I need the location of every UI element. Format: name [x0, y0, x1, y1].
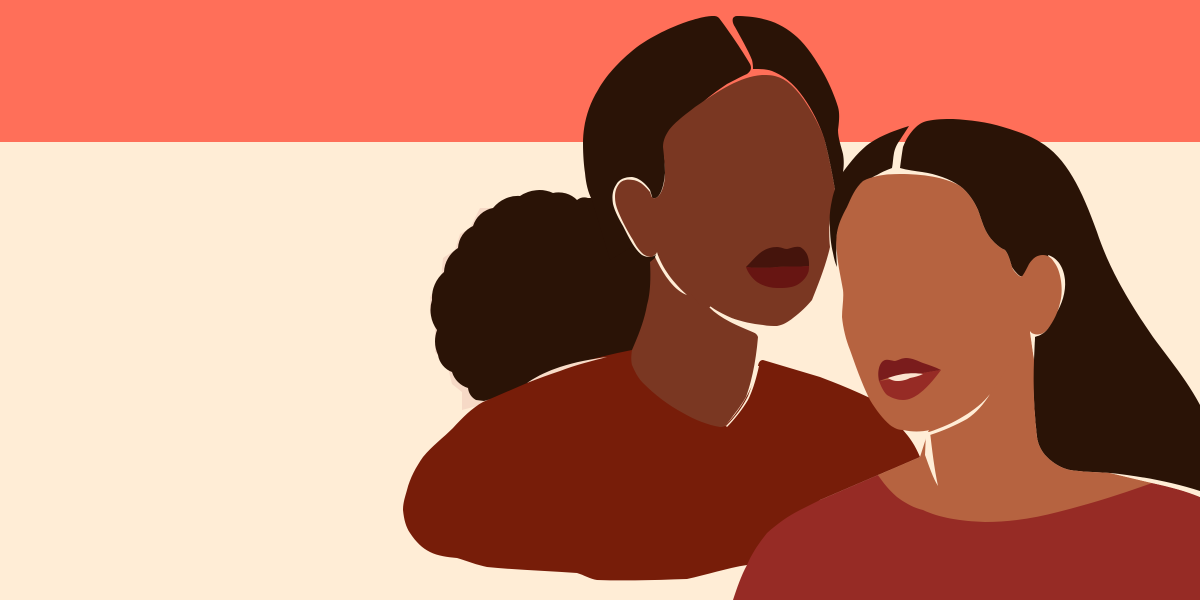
shirt: back woman	[403, 350, 920, 580]
lips: back woman	[746, 247, 809, 288]
chest and neck: front woman	[878, 320, 1152, 530]
neck sliver: front woman	[925, 432, 938, 486]
afro puff hair	[430, 190, 665, 401]
lower lip	[879, 370, 941, 400]
jaw line sliver: back woman	[655, 252, 687, 295]
back figure: dark-skinned woman with afro puff	[403, 16, 920, 580]
face: back woman	[615, 75, 835, 326]
shirt: front woman	[733, 475, 1200, 600]
shoulder sliver: back woman	[527, 357, 607, 383]
lips: front woman	[878, 358, 941, 400]
afro soft halo	[430, 208, 500, 410]
front figure: lighter-skinned woman with long hair	[733, 119, 1200, 600]
upper lip	[746, 247, 809, 268]
collar sliver: back woman	[726, 366, 759, 427]
chin sliver: back woman	[710, 307, 757, 333]
teeth	[888, 373, 923, 381]
neck: back woman	[631, 250, 758, 427]
neck right sliver: front woman	[1030, 331, 1035, 360]
upper lip	[878, 358, 941, 381]
top hair left section	[583, 16, 751, 260]
ear outline: back woman	[612, 177, 665, 257]
background: cream panel	[0, 142, 1200, 600]
long hair right section	[900, 119, 1200, 492]
jaw sliver: front woman	[929, 394, 990, 435]
lower lip	[746, 266, 809, 288]
ear cream edge: front woman	[1030, 255, 1065, 337]
background: coral band	[0, 0, 1200, 142]
top hair right section	[733, 16, 844, 225]
hair left section	[830, 126, 909, 267]
shoulder sliver: front woman	[1110, 473, 1200, 497]
face: front woman	[836, 174, 1062, 432]
